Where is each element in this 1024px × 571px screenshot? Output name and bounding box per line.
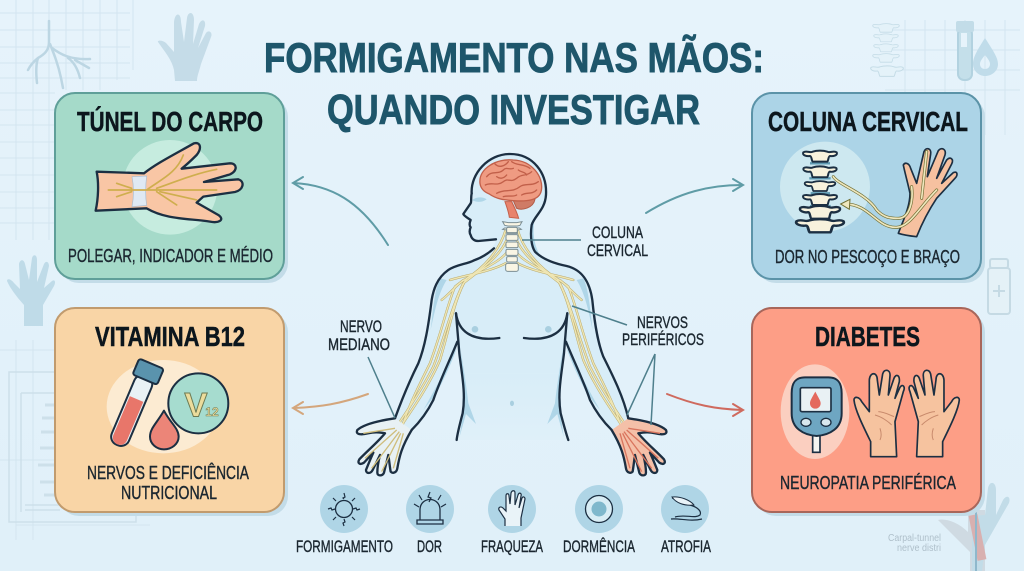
heading: DIABETES — [815, 321, 920, 352]
brain — [480, 160, 542, 218]
anatomy figure — [357, 154, 666, 475]
heading: VITAMINA B12 — [95, 321, 245, 352]
symptom: atrofia: ATROFIA — [661, 537, 711, 556]
icon: glucose meter and hands — [781, 364, 959, 459]
arrow: to diabetes — [667, 394, 743, 416]
panel: diabetes — [752, 308, 985, 516]
title: FORMIGAMENTO NAS MÃOS: — [264, 34, 764, 81]
nerves — [362, 230, 662, 468]
arrow: to túnel do carpo — [293, 177, 388, 245]
arrow: to coluna cervical — [646, 179, 743, 213]
decoration: hand top left — [158, 13, 212, 81]
label: nervos periféricos: PERIFÉRICOS — [622, 330, 704, 349]
icon: test tube, drop and vitamin sphere — [105, 358, 228, 453]
label: coluna cervical: COLUNA — [592, 223, 643, 242]
left hand — [357, 418, 412, 475]
label: nervo mediano — [328, 317, 395, 418]
label: nervos periféricos: NERVOS — [637, 313, 688, 332]
decoration: caption: nerve distri — [897, 543, 941, 554]
caption: POLEGAR, INDICADOR E MÉDIO — [68, 245, 273, 266]
body outline — [395, 154, 628, 440]
symptom: formigamento — [296, 485, 393, 556]
decoration: spine diagram — [9, 372, 136, 522]
icon: test tube, drop and vitamin sphere: 12 — [205, 405, 219, 419]
decoration: nerve tree — [28, 21, 90, 88]
icon: test tube, drop and vitamin sphere: V — [184, 387, 208, 425]
icon: hand with median nerve — [96, 140, 243, 235]
symptom: dor: DOR — [417, 537, 442, 556]
panel: coluna cervical — [752, 93, 985, 283]
nipples and navel — [472, 326, 552, 406]
icon row: symptoms — [296, 485, 711, 556]
decoration: caption — [888, 533, 941, 554]
caption: NEUROPATIA PERIFÉRICA — [780, 472, 956, 493]
symptom: dor — [406, 485, 454, 556]
symptom: dormência: DORMÊNCIA — [563, 537, 635, 556]
panel: túnel do carpo — [55, 93, 288, 283]
label: coluna cervical — [522, 223, 648, 260]
decoration: test tube — [956, 21, 974, 80]
icon: spine and arm — [780, 142, 957, 237]
title — [264, 34, 764, 133]
panel: vitamina b12 — [55, 308, 288, 516]
symptom: formigamento: FORMIGAMENTO — [296, 537, 393, 556]
label: nervo mediano: MEDIANO — [328, 335, 390, 354]
title: QUANDO INVESTIGAR — [327, 86, 700, 133]
decoration: drop — [973, 38, 998, 76]
label: coluna cervical: CERVICAL — [587, 241, 648, 260]
body shading — [423, 197, 600, 438]
symptom: atrofia — [661, 485, 711, 556]
symptom: fraqueza: FRAQUEZA — [481, 537, 543, 556]
heading: TÚNEL DO CARPO — [77, 106, 263, 137]
symptom: fraqueza — [481, 485, 543, 556]
caption: NERVOS E DEFICIÊNCIA — [87, 462, 249, 483]
right hand — [612, 418, 666, 475]
panel: vitamina b12: NUTRICIONAL — [121, 482, 217, 503]
symptom: dormência — [563, 485, 635, 556]
spine — [503, 222, 522, 271]
decoration: hand nerve bottom right — [938, 483, 1010, 571]
decoration: hand left — [7, 255, 55, 326]
decoration: spine top right — [871, 24, 903, 76]
decoration: caption: Carpal-tunnel — [888, 533, 941, 544]
arrow: to vitamina b12 — [293, 394, 368, 414]
label: nervo mediano: NERVO — [340, 317, 382, 336]
body silhouette — [395, 154, 628, 440]
decoration: bottle — [988, 259, 1010, 314]
label: nervos periféricos — [572, 306, 704, 425]
